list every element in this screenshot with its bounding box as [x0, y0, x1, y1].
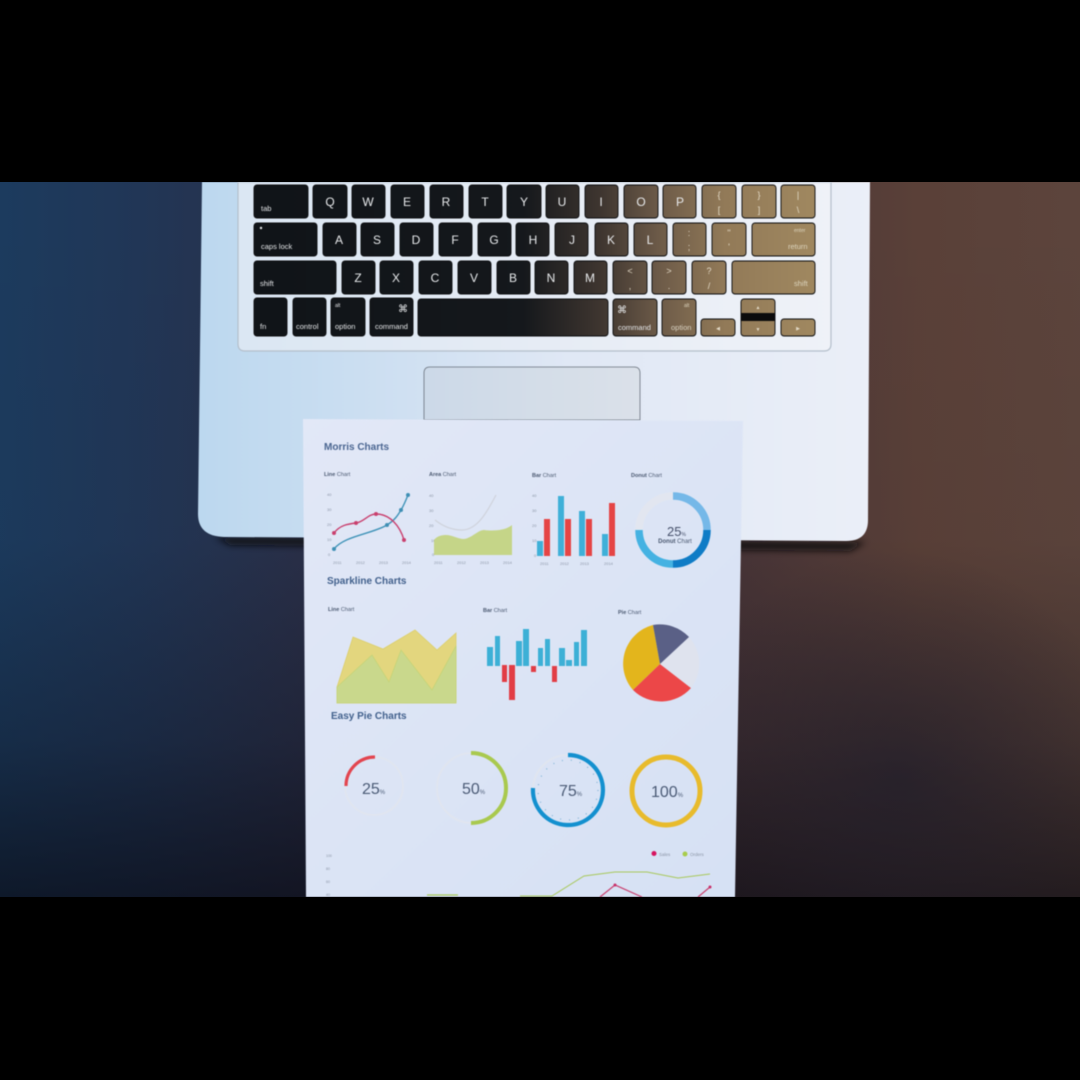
- keyboard legends: ⌘: [398, 304, 408, 315]
- ring: 50%: [437, 753, 507, 823]
- ring: 75%: [533, 755, 603, 825]
- donut chart: Donut Chart: [658, 539, 692, 545]
- keyboard legends: ⌘: [617, 305, 627, 316]
- laptop body: [198, 182, 870, 541]
- ring: 100%: [632, 757, 700, 825]
- laptop: command: [375, 322, 408, 331]
- desk background: [0, 182, 1080, 897]
- laptop: shift: [260, 279, 275, 288]
- keyboard legends: ]: [758, 205, 760, 215]
- area chart: 10: [431, 538, 436, 543]
- keyboard legends: B: [509, 271, 517, 285]
- area chart: 20: [429, 523, 434, 528]
- laptop shadow on desk: [215, 537, 866, 551]
- keyboard legends: H: [529, 233, 537, 247]
- keyboard legends: Z: [354, 271, 362, 285]
- line chart: 0: [328, 552, 331, 557]
- laptop: enter: [794, 228, 806, 234]
- trackpad: [424, 367, 640, 420]
- keyboard legends: C: [431, 271, 440, 285]
- keyboard legends: I: [599, 195, 603, 209]
- laptop: return: [788, 242, 808, 251]
- bar chart: 0: [534, 553, 537, 558]
- keyboard legends: A: [335, 233, 343, 247]
- keyboard legends: E: [403, 195, 411, 209]
- paper sheet: [303, 419, 743, 897]
- line chart: Line Chart: [324, 472, 351, 478]
- keyboard legends: U: [558, 195, 566, 209]
- keyboard legends: Q: [325, 195, 335, 209]
- keyboard well: [238, 182, 831, 351]
- keyboard legends: ▲: [756, 305, 760, 311]
- area chart: 30: [429, 508, 434, 513]
- keyboard legends: \: [797, 205, 800, 215]
- donut chart: 25%: [667, 524, 686, 539]
- area chart: 2012: [457, 560, 467, 565]
- area chart: 2011: [434, 560, 443, 565]
- bottom line chart: 40: [326, 893, 330, 897]
- keyboard legends: G: [489, 233, 499, 247]
- heading: Sparkline Charts: Sparkline Charts: [327, 576, 407, 587]
- line chart: 2011: [333, 560, 342, 565]
- bar chart: 30: [532, 508, 537, 513]
- laptop: option: [335, 322, 355, 331]
- line chart: 10: [327, 537, 332, 542]
- keyboard legends: <: [627, 266, 633, 276]
- ring: 100%: 100%: [651, 784, 684, 801]
- keyboard legends: [325, 190, 800, 333]
- line chart: 2012: [356, 560, 366, 565]
- keyboard legends: X: [392, 271, 400, 285]
- legend: [652, 851, 705, 857]
- bar chart: 2014: [604, 561, 614, 566]
- legend: Orders: [690, 852, 705, 857]
- line chart: 2013: [379, 560, 389, 565]
- line chart: 40: [327, 492, 332, 497]
- keyboard legends: R: [442, 195, 451, 209]
- keyboard legends: F: [451, 233, 459, 247]
- area chart: 2013: [480, 560, 490, 565]
- sparkline area chart: Line Chart: [328, 607, 355, 613]
- laptop: caps lock: [261, 242, 293, 251]
- line chart: 30: [327, 507, 332, 512]
- bottom line chart: 100: [326, 854, 332, 858]
- ring: 50%: 50%: [462, 781, 486, 798]
- bar chart: 20: [532, 523, 537, 528]
- keyboard legends: K: [607, 233, 615, 247]
- top black band: [0, 0, 1080, 182]
- pie chart: [618, 610, 699, 701]
- line chart: 2014: [402, 560, 412, 565]
- keyboard legends: S: [373, 233, 381, 247]
- keyboard legends: V: [470, 271, 478, 285]
- laptop: alt: [335, 303, 341, 309]
- area chart: Area Chart: [429, 472, 457, 478]
- laptop: alt: [684, 303, 690, 309]
- bar chart: [532, 473, 615, 566]
- sparkline bar chart: Bar Chart: [483, 608, 508, 614]
- keyboard legends: ': [728, 242, 730, 252]
- keyboard legends: {: [717, 190, 721, 200]
- keyboard legends: J: [569, 233, 575, 247]
- laptop: tab: [261, 204, 271, 213]
- keyboard legends: P: [676, 195, 684, 209]
- bar chart: 2012: [560, 561, 570, 566]
- keyboard legends: ;: [688, 242, 690, 252]
- area chart: 2014: [503, 560, 513, 565]
- keyboard legends: ,: [629, 281, 631, 291]
- bar chart: 10: [532, 538, 537, 543]
- legend: Sales: [659, 852, 671, 857]
- ring: 25%: 25%: [362, 781, 386, 798]
- bar chart: 2013: [580, 561, 590, 566]
- keyboard legends: .: [668, 281, 670, 291]
- keyboard legends: ◀: [716, 326, 720, 332]
- area chart: 40: [429, 493, 434, 498]
- keyboard keys: [254, 185, 815, 336]
- keyboard legends: /: [708, 281, 711, 291]
- arrow key gap: [741, 313, 775, 321]
- keyboard legends: W: [362, 195, 374, 209]
- laptop: shift: [794, 279, 809, 288]
- bar chart: 2011: [540, 561, 549, 566]
- keyboard legends: :: [688, 228, 690, 238]
- laptop: fn: [260, 322, 266, 331]
- laptop: control: [296, 322, 319, 331]
- keyboard legends: ": [727, 228, 731, 238]
- ring: 25%: [345, 757, 403, 815]
- bottom black band: [0, 897, 1080, 1080]
- bottom line chart: 80: [326, 867, 330, 871]
- bottom line chart: 60: [326, 880, 330, 884]
- area chart: 0: [432, 552, 435, 557]
- keyboard legends: O: [636, 195, 646, 209]
- keyboard legends: [: [718, 205, 721, 215]
- keyboard legends: ▶: [796, 326, 800, 332]
- laptop: command: [618, 323, 651, 332]
- heading: Morris Charts: Morris Charts: [324, 442, 389, 453]
- keyboard legends: |: [797, 190, 799, 200]
- bar chart: Bar Chart: [532, 473, 557, 479]
- donut chart: Donut Chart: [631, 473, 662, 479]
- bottom line chart: [326, 851, 712, 897]
- ring: 75%: 75%: [559, 783, 583, 800]
- keyboard legends: N: [547, 271, 555, 285]
- area chart: [429, 472, 513, 565]
- keyboard legends: Y: [520, 195, 528, 209]
- keyboard legends: L: [647, 233, 654, 247]
- pie chart: Pie Chart: [618, 610, 642, 616]
- keyboard legends: ?: [706, 266, 712, 276]
- laptop: option: [671, 323, 691, 332]
- line chart: [324, 472, 412, 565]
- line chart: 20: [327, 522, 332, 527]
- heading: Easy Pie Charts: Easy Pie Charts: [331, 711, 407, 722]
- sparkline bar chart: [483, 608, 587, 700]
- keyboard legends: M: [585, 271, 595, 285]
- bar chart: 40: [532, 493, 537, 498]
- laptop: [198, 182, 870, 541]
- keyboard legends: }: [757, 190, 761, 200]
- donut chart: [631, 473, 707, 564]
- keyboard legends: T: [481, 195, 489, 209]
- keyboard legends: ▼: [756, 327, 760, 333]
- sparkline area chart: [328, 607, 456, 703]
- keyboard legends: D: [412, 233, 421, 247]
- keyboard legends: >: [666, 266, 672, 276]
